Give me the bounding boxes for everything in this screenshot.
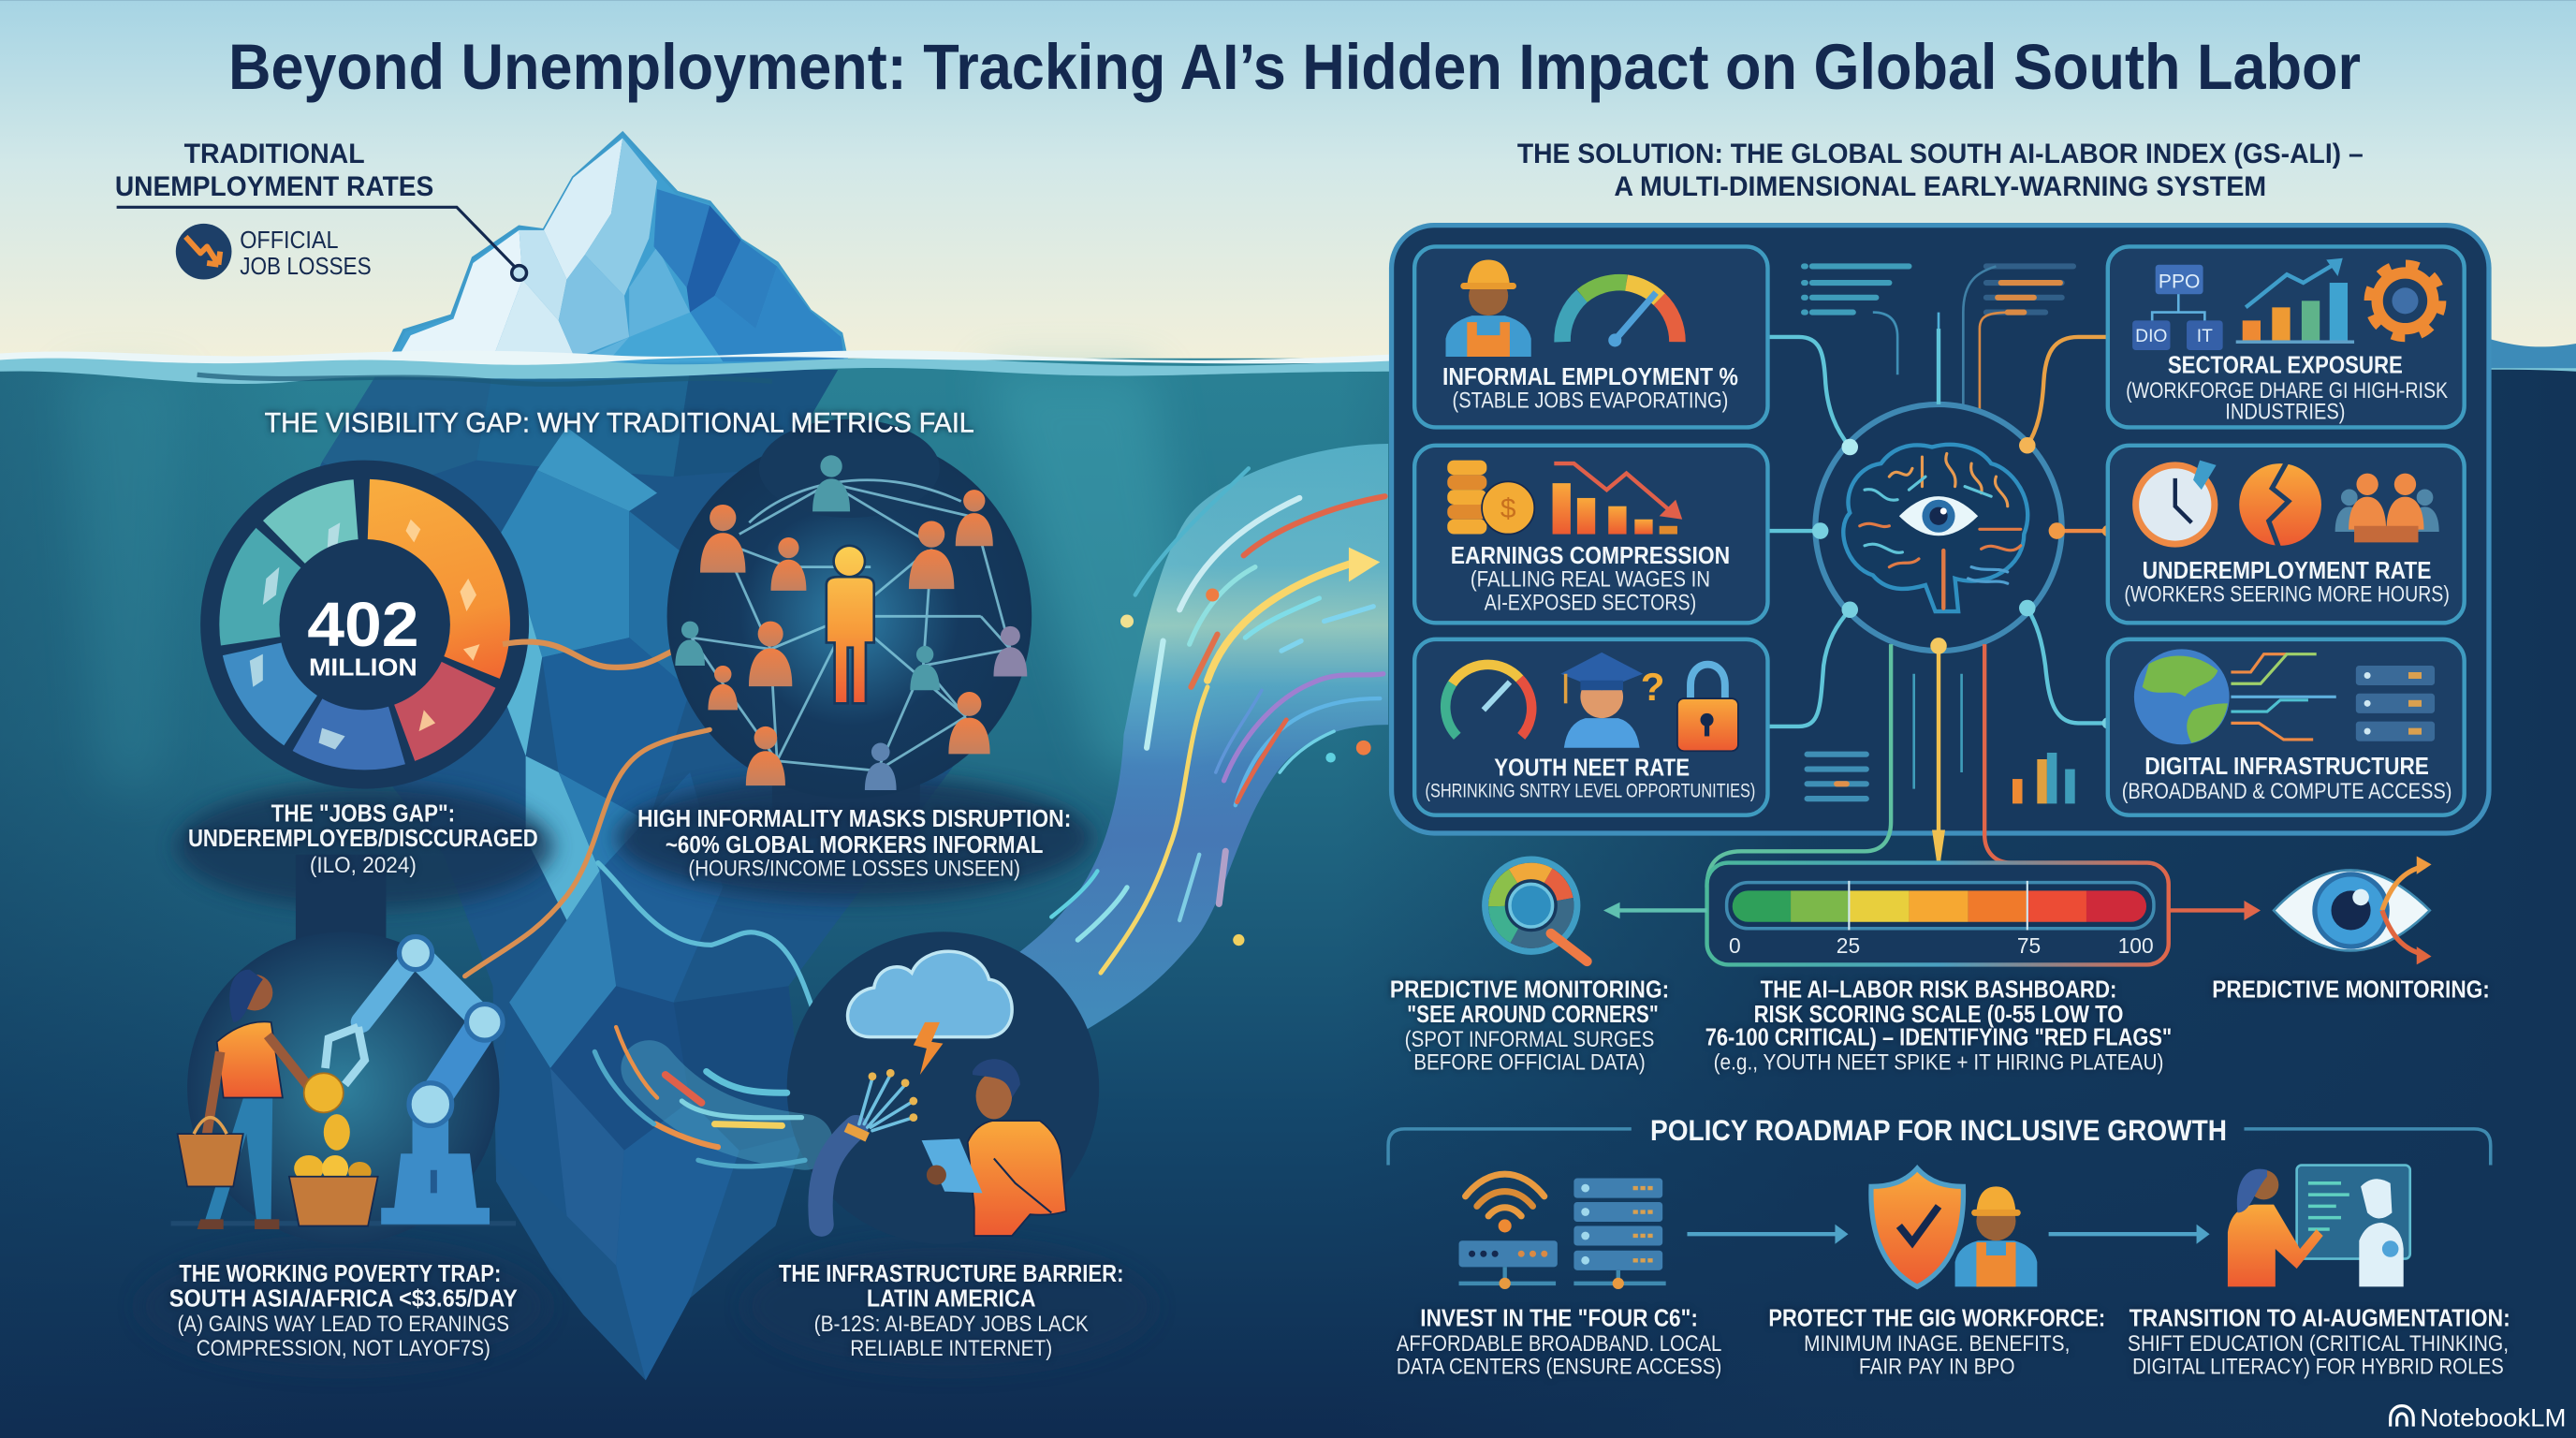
card: digital infrastructure: DIGITAL INFRASTRUCTURE <box>2144 754 2429 780</box>
icon: cloud <box>848 951 1012 1037</box>
panel: 402 million donut: 402 <box>307 591 419 660</box>
card: sectoral exposure: SECTORAL EXPOSURE <box>2168 353 2403 379</box>
icon: lock <box>1677 665 1738 751</box>
icon: graduate <box>1560 653 1664 748</box>
icon: brain <box>1843 445 2027 611</box>
icon: falling bars <box>1553 463 1682 535</box>
text: gig workforce <box>1768 1306 2105 1379</box>
icon: org chart: PPO <box>2159 271 2200 292</box>
river streaks <box>1051 468 1385 973</box>
lower swirl <box>594 1027 805 1167</box>
card: informal employment: INFORMAL EMPLOYMENT % <box>1442 364 1738 390</box>
icon: coins and basket <box>289 1073 378 1225</box>
icon: coins <box>1447 461 1534 535</box>
text: jobs gap: UNDEREMPLOYEB/DISCCURAGED <box>188 826 538 852</box>
card: earnings compression <box>1414 446 1767 623</box>
icon: robot arm <box>326 937 503 1225</box>
icon: servers <box>2356 666 2435 741</box>
panel: working poverty robot circle <box>171 932 516 1244</box>
callout: traditional unemployment rates: JOB LOSSES <box>240 254 372 280</box>
text: predictive monitoring left: "SEE AROUND CORNERS" <box>1407 1002 1659 1028</box>
heading: the solution <box>1517 139 2364 202</box>
card: sectoral exposure <box>2108 246 2465 427</box>
text: working poverty trap: COMPRESSION, NOT LAYOF7S) <box>197 1337 490 1361</box>
text: working poverty trap <box>169 1261 518 1361</box>
arrow: gauge to eye <box>2169 901 2261 920</box>
text: four Cs: AFFORDABLE BROADBAND. LOCAL <box>1397 1332 1721 1357</box>
small bar chart <box>2012 753 2075 803</box>
risk gauge dashboard: 25 <box>1837 933 1860 958</box>
card: youth NEET rate <box>1414 639 1767 815</box>
panel: 402 million donut <box>200 461 529 789</box>
card: informal employment <box>1414 246 1767 427</box>
NotebookLM logo: NotebookLM <box>2420 1403 2566 1432</box>
panel: infrastructure barrier circle <box>594 932 1099 1244</box>
decorative data lines <box>1804 266 2073 799</box>
arrow: policy step 1 to 2 <box>1687 1225 1848 1244</box>
panel: informal workers network <box>667 419 1032 799</box>
text: high informality: (HOURS/INCOME LOSSES UNSEEN) <box>688 858 1020 882</box>
text: gig workforce: PROTECT THE GIG WORKFORCE: <box>1768 1306 2105 1332</box>
icon: gauge <box>1445 665 1531 736</box>
people icons <box>700 490 993 785</box>
text: predictive monitoring left: (SPOT INFORMAL SURGES <box>1405 1028 1654 1052</box>
callout: traditional unemployment rates <box>115 139 527 280</box>
card: underemployment rate: (WORKERS SEERING MORE HOURS) <box>2124 583 2450 608</box>
panel: dashboard <box>1392 226 2489 833</box>
callout: traditional unemployment rates: OFFICIAL <box>240 227 339 254</box>
brain hub <box>1767 329 2114 729</box>
iceberg below water <box>279 370 986 1380</box>
background sky <box>0 0 2576 365</box>
text: risk dashboard <box>1705 976 2172 1076</box>
card: underemployment rate <box>2108 446 2465 623</box>
donut segment marks <box>250 520 479 749</box>
icon: magnifier gauge <box>1486 859 1587 961</box>
icon: predictive eye <box>2274 857 2432 964</box>
text: risk dashboard: THE AI–LABOR RISK BASHBOARD: <box>1761 976 2116 1003</box>
text: predictive monitoring right: PREDICTIVE MONITORING: <box>2212 976 2490 1003</box>
icon: globe <box>2134 649 2230 744</box>
text: infrastructure barrier: (B-12S: AI-BEADY JOBS LACK <box>814 1313 1089 1337</box>
central figure <box>827 546 874 703</box>
connector: donut to network <box>503 642 681 668</box>
text: working poverty trap: THE WORKING POVERTY TRAP: <box>179 1261 501 1287</box>
icon: gear <box>2369 265 2441 337</box>
icon: teacher, screen and robot <box>2228 1166 2410 1286</box>
text: gig workforce: FAIR PAY IN BPO <box>1859 1355 2015 1379</box>
heading: visibility gap: THE VISIBILITY GAP: WHY TRADITIONAL METRICS FAIL <box>265 408 974 439</box>
icon: fibre cable <box>820 1069 917 1225</box>
network lines <box>692 480 1010 770</box>
text: four Cs <box>1397 1306 1721 1379</box>
text: working poverty trap: SOUTH ASIA/AFRICA <$3.65/DAY <box>169 1285 518 1312</box>
data river flow <box>920 444 1388 1051</box>
icon: org chart <box>2132 265 2223 350</box>
text: infrastructure barrier: LATIN AMERICA <box>867 1285 1036 1312</box>
risk gauge dashboard: 75 <box>2017 933 2041 958</box>
connectors <box>1767 329 2108 726</box>
text: jobs gap: THE "JOBS GAP": <box>271 801 455 828</box>
icon: org chart: DIO <box>2135 327 2167 346</box>
icon: person with tablet <box>922 1059 1066 1236</box>
text: high informality <box>637 806 1071 882</box>
text: AI augmentation: DIGITAL LITERACY) FOR HYBRID ROLES <box>2132 1355 2504 1379</box>
text: high informality: ~60% GLOBAL MORKERS INFORMAL <box>666 832 1043 858</box>
card: digital infrastructure <box>2108 639 2465 815</box>
text: infrastructure barrier <box>779 1261 1123 1361</box>
text: jobs gap <box>188 801 538 878</box>
icon: lightning bolt <box>914 1022 943 1075</box>
icon: workers group <box>2335 474 2439 542</box>
text: jobs gap: (ILO, 2024) <box>310 854 417 878</box>
icon: org chart: IT <box>2197 327 2213 346</box>
dark vignettes behind circles <box>138 772 1155 1372</box>
text: working poverty trap: (A) GAINS WAY LEAD TO ERANINGS <box>178 1313 509 1337</box>
card: underemployment rate: UNDEREMPLOYMENT RATE <box>2143 558 2432 584</box>
icon: clock <box>2136 461 2217 544</box>
heading: the solution: A MULTI-DIMENSIONAL EARLY-WARNING SYSTEM <box>1614 171 2266 202</box>
text: AI augmentation: TRANSITION TO AI-AUGMENTATION: <box>2130 1306 2510 1332</box>
risk gauge dashboard: 100 <box>2118 933 2154 958</box>
circuit lines <box>2231 654 2336 740</box>
icon: shield and worker <box>1871 1168 2037 1286</box>
donut segments <box>250 509 479 740</box>
connector nodes <box>1812 437 2114 729</box>
arrow: policy step 2 to 3 <box>2049 1225 2210 1244</box>
callout: traditional unemployment rates: UNEMPLOYMENT RATES <box>115 171 433 202</box>
text: gig workforce: MINIMUM INAGE. BENEFITS, <box>1804 1332 2070 1357</box>
icon: wifi and servers <box>1459 1174 1666 1289</box>
risk gauge dashboard <box>1707 863 2169 964</box>
arrow: gauge to magnifier <box>1603 902 1707 918</box>
text: four Cs: INVEST IN THE "FOUR C6": <box>1420 1306 1698 1332</box>
card: digital infrastructure: (BROADBAND & COMPUTE ACCESS) <box>2122 780 2452 804</box>
text: risk dashboard: RISK SCORING SCALE (0-55 LOW TO <box>1754 1002 2123 1028</box>
panel: 402 million donut: MILLION <box>309 653 417 681</box>
card: sectoral exposure: (WORKFORGE DHARE GI HIGH-RISK <box>2126 379 2448 404</box>
policy roadmap heading: POLICY ROADMAP FOR INCLUSIVE GROWTH <box>1650 1113 2227 1147</box>
connector lines through iceberg <box>465 729 812 1005</box>
icon: coins: $ <box>1500 493 1516 524</box>
risk gauge dashboard: 0 <box>1729 933 1741 958</box>
waterline waves <box>0 339 2576 384</box>
text: infrastructure barrier: THE INFRASTRUCTURE BARRIER: <box>779 1261 1123 1287</box>
text: AI augmentation <box>2128 1306 2510 1379</box>
icon: rising bars <box>2236 258 2354 344</box>
text: risk dashboard: 76-100 CRITICAL) – IDENTIFYING "RED FLAGS" <box>1705 1024 2172 1050</box>
card: earnings compression: EARNINGS COMPRESSION <box>1451 543 1730 569</box>
icon: woman with basket <box>178 970 312 1229</box>
card: earnings compression: (FALLING REAL WAGES IN <box>1471 568 1710 593</box>
text: predictive monitoring left: PREDICTIVE MONITORING: <box>1390 976 1669 1003</box>
text: four Cs: DATA CENTERS (ENSURE ACCESS) <box>1397 1355 1721 1379</box>
card: youth NEET rate: YOUTH NEET RATE <box>1494 756 1690 782</box>
icon: graduate: ? <box>1641 665 1664 709</box>
card: informal employment: (STABLE JOBS EVAPORATING) <box>1453 389 1728 413</box>
text: AI augmentation: SHIFT EDUCATION (CRITICAL THINKING, <box>2128 1332 2509 1357</box>
text: risk dashboard: (e.g., YOUTH NEET SPIKE + IT HIRING PLATEAU) <box>1714 1051 2163 1076</box>
gauge colour bar <box>1733 881 2146 931</box>
text: infrastructure barrier: RELIABLE INTERNET) <box>850 1337 1052 1361</box>
heading: the solution: THE SOLUTION: THE GLOBAL SOUTH AI-LABOR INDEX (GS-ALI) – <box>1517 139 2364 169</box>
connectors: hub to risk gauge <box>1707 638 2169 901</box>
icon: worker <box>1445 259 1531 357</box>
icon: broken circle <box>2239 462 2321 548</box>
title: Beyond Unemployment: Tracking AI’s Hidden Impact on Global South Labor <box>228 31 2361 103</box>
card: sectoral exposure: INDUSTRIES) <box>2225 401 2345 425</box>
text: predictive monitoring left <box>1390 976 1669 1076</box>
card: earnings compression: AI-EXPOSED SECTORS) <box>1485 591 1696 615</box>
icon: official job losses <box>176 224 231 280</box>
background ocean <box>0 359 2576 1438</box>
iceberg above water <box>388 133 848 365</box>
text: high informality: HIGH INFORMALITY MASKS DISRUPTION: <box>637 806 1071 832</box>
text: predictive monitoring left: BEFORE OFFICIAL DATA) <box>1413 1051 1646 1076</box>
icon: gauge <box>1562 283 1677 345</box>
card: youth NEET rate: (SHRINKING SNTRY LEVEL OPPORTUNITIES) <box>1426 780 1755 801</box>
policy roadmap heading <box>1388 1113 2491 1166</box>
callout: traditional unemployment rates: TRADITIONAL <box>184 139 365 169</box>
